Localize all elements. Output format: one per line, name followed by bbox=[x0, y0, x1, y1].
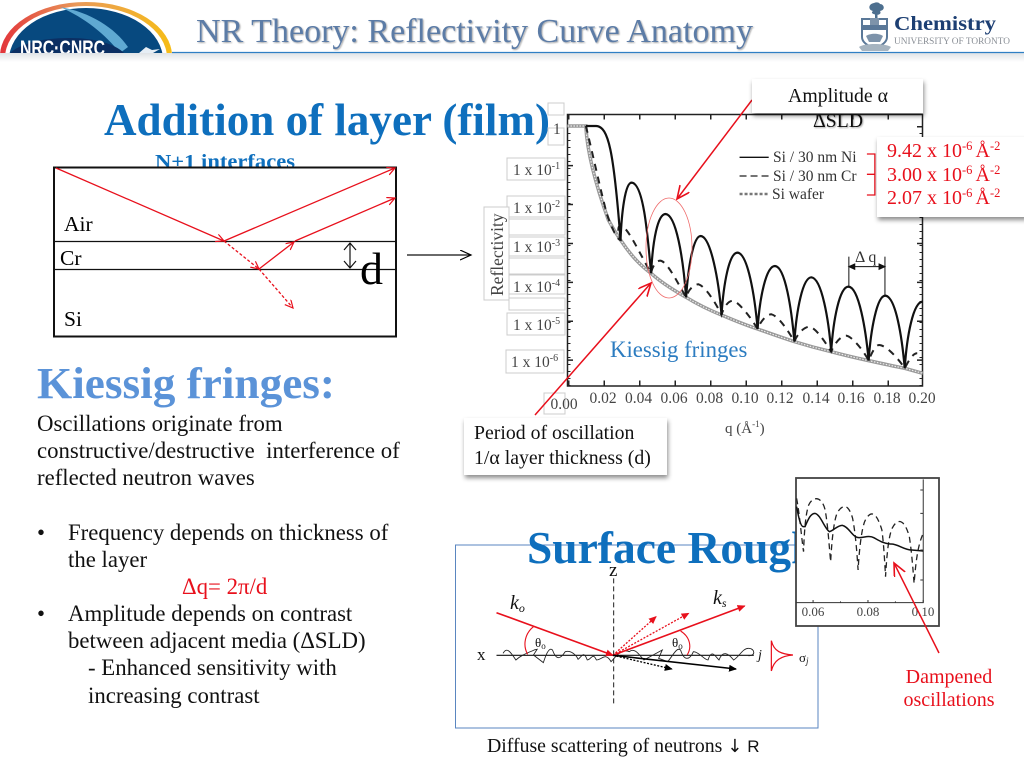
text block: explanation: between adjacent media (ΔSLD) bbox=[68, 628, 366, 653]
label: Cr: Cr bbox=[60, 246, 82, 270]
callout: SLD values: -2 bbox=[990, 139, 1000, 153]
x axis tick labels: 0.10 bbox=[731, 390, 759, 407]
header bar bbox=[0, 52, 1024, 62]
axis and vector labels: j bbox=[805, 656, 809, 666]
icon: crest bbox=[859, 2, 891, 51]
axis and vector labels: σ bbox=[799, 650, 806, 665]
bracket bbox=[867, 154, 875, 195]
y axis label boxes bbox=[506, 103, 565, 414]
y axis tick labels: 1 x 10 bbox=[513, 279, 552, 296]
y axis tick labels: -1 bbox=[552, 161, 560, 172]
layer diagram bbox=[54, 168, 396, 336]
delta q label: Δ q bbox=[855, 249, 876, 266]
y axis tick labels: -4 bbox=[552, 278, 560, 289]
text block: explanation: Frequency depends on thickness of bbox=[68, 520, 389, 545]
x axis tick labels: 0.14 bbox=[802, 390, 830, 407]
curve: Si wafer bbox=[567, 126, 923, 373]
axis and vector labels: j bbox=[756, 648, 762, 663]
y axis title: Reflectivity bbox=[487, 213, 507, 296]
axis and vector labels bbox=[477, 560, 809, 666]
y axis tick labels: -6 bbox=[550, 353, 558, 364]
x axis tick labels: 0.02 bbox=[589, 390, 617, 407]
arrow: dampened oscillations bbox=[894, 563, 939, 653]
logo: NRC-CNRC bbox=[0, 2, 172, 53]
x axis tick labels: 0.08 bbox=[696, 390, 723, 407]
callout: SLD values: Å bbox=[976, 164, 991, 186]
callout: SLD values: -6 bbox=[962, 186, 976, 200]
y axis tick labels: 1 x 10 bbox=[513, 200, 552, 217]
heading: surface roughness: Surface Roughness bbox=[527, 522, 897, 573]
heading: addition of layer: Addition of layer (film) bbox=[104, 95, 550, 145]
logo: NRC-CNRC: NRC·CNRC bbox=[20, 37, 105, 60]
logo: University of Toronto Chemistry: Chemistry bbox=[894, 13, 997, 35]
text block: explanation: - Enhanced sensitivity with bbox=[88, 655, 337, 680]
x axis title: q (Å bbox=[725, 421, 752, 437]
text block: explanation: Δq= 2π/d bbox=[182, 574, 268, 599]
subheading: N+1 interfaces: N+1 interfaces bbox=[155, 151, 295, 173]
y axis tick labels: 1 bbox=[553, 121, 561, 138]
label: dampened oscillations bbox=[903, 666, 995, 711]
x axis tick labels: 0.04 bbox=[625, 390, 652, 407]
y axis tick labels: 1 x 10 bbox=[511, 354, 550, 371]
axis and vector labels: o bbox=[678, 641, 683, 651]
label: dampened oscillations: Dampened bbox=[906, 666, 992, 688]
legend labels bbox=[772, 149, 857, 203]
legend labels: Si / 30 nm Ni bbox=[773, 149, 857, 166]
x axis tick labels: 0.06 bbox=[660, 390, 688, 407]
inset x labels: 0.06 bbox=[802, 604, 825, 619]
callout: SLD values: -6 bbox=[962, 163, 976, 177]
x axis tick labels: 0.16 bbox=[837, 390, 865, 407]
arrow: diagram to chart bbox=[407, 254, 471, 256]
axis and vector labels: o bbox=[541, 641, 546, 651]
callout: SLD values: 3.00 x 10 bbox=[887, 164, 962, 186]
callout: amplitude: ΔSLD bbox=[813, 110, 863, 132]
text block: explanation: Oscillations originate from bbox=[37, 411, 283, 436]
axis and vector labels: k bbox=[510, 592, 519, 614]
incident and reflected rays bbox=[56, 168, 395, 308]
callout: amplitude: Amplitude α bbox=[788, 85, 888, 107]
label: Si: Si bbox=[64, 307, 82, 331]
arrow: amplitude bbox=[677, 100, 752, 199]
delta q marker bbox=[849, 257, 885, 296]
inset x labels bbox=[802, 604, 934, 619]
fringe ellipse bbox=[646, 198, 692, 298]
axis and vector labels: θ bbox=[672, 635, 678, 650]
text block: explanation: the layer bbox=[68, 547, 148, 572]
text block: explanation: • bbox=[37, 601, 45, 626]
callout: period of oscillation: 1/α layer thickness (d) bbox=[474, 447, 651, 469]
axis and vector labels: x bbox=[477, 645, 486, 664]
axis and vector labels: k bbox=[713, 587, 722, 609]
y axis tick labels: -3 bbox=[552, 238, 560, 249]
y axis tick labels: 1 x 10 bbox=[513, 317, 552, 334]
scattering geometry bbox=[496, 578, 793, 705]
callout: SLD values: Å bbox=[976, 140, 991, 162]
inset x labels: 0.08 bbox=[857, 604, 879, 619]
title: NR Theory: Reflectivity Curve Anatomy bbox=[196, 13, 753, 50]
label: Kiessig fringes: Kiessig fringes bbox=[610, 337, 748, 362]
inset chart: dampened oscillations bbox=[796, 478, 939, 626]
y axis tick labels: -5 bbox=[552, 316, 560, 327]
scattered ray arrows bbox=[496, 606, 745, 669]
x axis tick labels: 0.00 bbox=[550, 396, 578, 413]
panel: surface roughness diagram bbox=[456, 522, 897, 728]
plot frame bbox=[568, 114, 922, 386]
legend labels: Si / 30 nm Cr bbox=[773, 168, 857, 185]
x axis title: ) bbox=[760, 421, 765, 437]
y axis tick labels: 1 x 10 bbox=[513, 239, 552, 256]
thickness arrow bbox=[344, 243, 356, 268]
text block: explanation: reflected neutron waves bbox=[37, 465, 255, 490]
legend lines bbox=[740, 157, 769, 194]
callout: SLD values: -2 bbox=[990, 186, 1000, 200]
text block: explanation: Amplitude depends on contrast bbox=[68, 601, 353, 626]
curves bbox=[567, 126, 923, 373]
x axis tick labels bbox=[550, 390, 936, 413]
callout: period of oscillation bbox=[464, 418, 667, 475]
curve: Si / 30 nm Cr bbox=[586, 126, 917, 368]
x axis title: -1 bbox=[752, 419, 760, 429]
text block: explanation: • bbox=[37, 520, 45, 545]
callout: SLD values: Å bbox=[976, 187, 991, 209]
text block: explanation: increasing contrast bbox=[88, 683, 260, 708]
callout: SLD values: -6 bbox=[962, 139, 976, 153]
axis and vector labels: o bbox=[519, 601, 525, 615]
logo: University of Toronto Chemistry bbox=[859, 2, 1010, 51]
axis and vector labels: s bbox=[722, 596, 727, 610]
label: dampened oscillations: oscillations bbox=[903, 689, 995, 711]
x axis tick labels: 0.12 bbox=[766, 390, 794, 407]
axis and vector labels: θ bbox=[535, 635, 541, 650]
axis and vector labels: z bbox=[609, 560, 617, 581]
curve: Si / 30 nm Ni bbox=[586, 126, 923, 368]
y axis tick labels: -2 bbox=[552, 199, 560, 210]
text block: explanation: constructive/destructive interference of bbox=[37, 438, 400, 463]
callout: SLD values: 2.07 x 10 bbox=[887, 187, 962, 209]
y axis tick labels bbox=[511, 121, 561, 371]
text block: explanation bbox=[37, 411, 400, 708]
arrow: period bbox=[535, 283, 651, 415]
x axis tick labels: 0.20 bbox=[908, 390, 936, 407]
caption: diffuse scattering: Diffuse scattering of neutrons ↓ R bbox=[487, 735, 760, 757]
inset x labels: 0.10 bbox=[912, 604, 934, 619]
callout: SLD values bbox=[877, 137, 1024, 217]
callout: amplitude bbox=[752, 79, 923, 132]
callout: period of oscillation: Period of oscillation bbox=[474, 422, 635, 444]
label: Air: Air bbox=[64, 212, 93, 236]
y axis tick labels: 1 x 10 bbox=[513, 162, 552, 179]
x axis tick labels: 0.18 bbox=[873, 390, 901, 407]
logo: University of Toronto Chemistry: UNIVERSITY OF TORONTO bbox=[894, 37, 1010, 47]
heading: Kiessig fringes: Kiessig fringes: bbox=[37, 359, 335, 408]
legend labels: Si wafer bbox=[772, 186, 825, 203]
callout: SLD values: -2 bbox=[990, 163, 1000, 177]
label: d: d bbox=[360, 243, 383, 294]
reflectivity chart bbox=[484, 103, 936, 437]
callout: SLD values: 9.42 x 10 bbox=[887, 140, 962, 162]
